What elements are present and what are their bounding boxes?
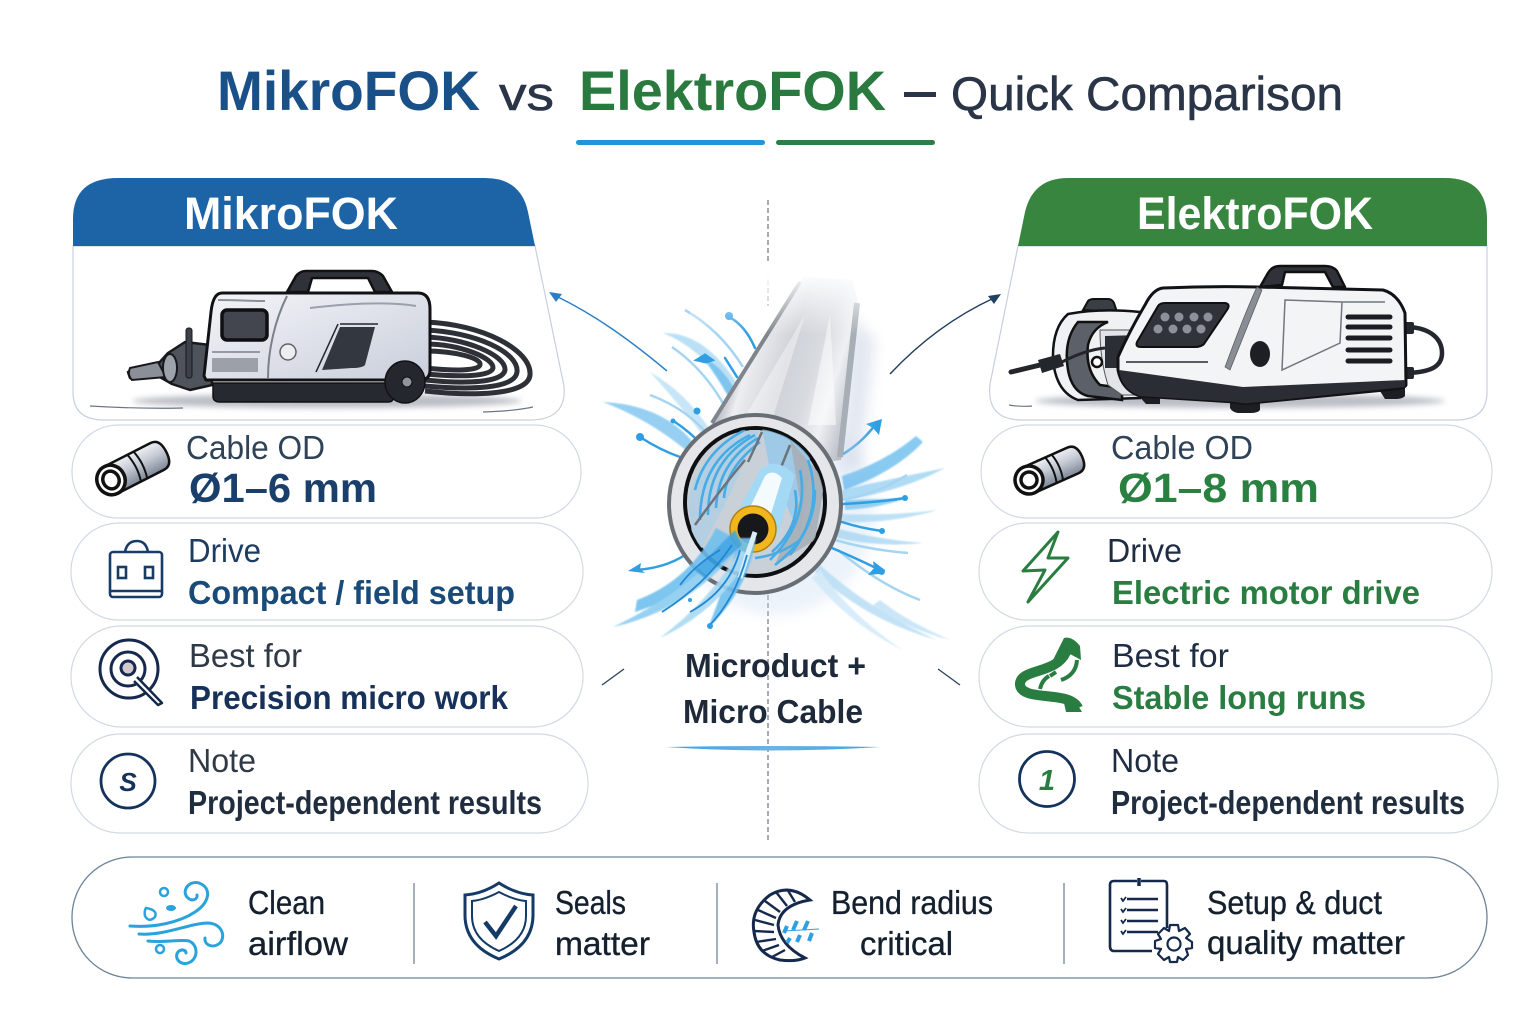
left row: Best for xyxy=(71,626,583,727)
left row: Best for: Best for xyxy=(189,637,302,674)
left row: Drive: Drive xyxy=(188,532,261,569)
title: MikroFOK xyxy=(217,59,480,122)
icon: clean airflow xyxy=(130,883,223,964)
bottom takeaways bar: Clean xyxy=(248,884,325,921)
micro cable with gold ferrule xyxy=(730,464,795,552)
right row: Cable OD: Cable OD xyxy=(1111,429,1253,466)
icon: S circle xyxy=(101,754,155,808)
connector tick left xyxy=(602,669,624,685)
central microduct illustration xyxy=(603,262,950,650)
title underline xyxy=(576,140,935,145)
icon: portable MikroFOK machine xyxy=(90,271,533,412)
right row: Best for: Stable long runs xyxy=(1112,679,1366,716)
ElektroFOK header xyxy=(1018,178,1487,246)
connector tick right xyxy=(938,669,960,685)
bottom takeaways bar: airflow xyxy=(248,925,348,962)
bottom takeaways bar: Setup & duct xyxy=(1207,884,1382,921)
title: ElektroFOK xyxy=(579,59,886,122)
center label: Microduct + xyxy=(685,647,866,684)
MikroFOK header xyxy=(73,178,535,246)
arrow: to MikroFOK xyxy=(549,292,667,371)
left row: Note: Note xyxy=(188,742,256,779)
left row: Drive: Compact / field setup xyxy=(188,574,515,611)
panel: MikroFOK machine card xyxy=(73,178,564,420)
title: vs xyxy=(499,67,554,120)
icon: number circle xyxy=(1020,752,1074,806)
ElektroFOK header: ElektroFOK xyxy=(1137,188,1373,239)
left row: Best for: Precision micro work xyxy=(190,679,509,716)
pipe body xyxy=(690,262,880,470)
right row: Drive: Electric motor drive xyxy=(1112,574,1420,611)
title xyxy=(217,59,1343,122)
right row: Best for: Best for xyxy=(1112,637,1229,674)
airflow rays front xyxy=(613,528,756,638)
left row: Note xyxy=(71,734,588,833)
title: Quick Comparison xyxy=(951,67,1343,120)
icon: number circle: 1 xyxy=(1039,765,1055,797)
right row: Note xyxy=(979,734,1498,833)
MikroFOK header: MikroFOK xyxy=(184,188,398,239)
bottom takeaways bar: Seals xyxy=(555,884,626,921)
right row: Note: Project-dependent results xyxy=(1111,784,1465,821)
left row: Drive xyxy=(71,523,583,620)
arrow: to ElektroFOK xyxy=(890,294,1001,374)
center label xyxy=(666,647,880,750)
center dashed divider xyxy=(767,200,769,842)
pipe opening ring xyxy=(669,415,841,593)
left row: Note: Project-dependent results xyxy=(188,784,542,821)
left row: Cable OD: Cable OD xyxy=(186,429,325,466)
bottom takeaways bar: Bend radius xyxy=(831,884,993,921)
icon: checklist and gear xyxy=(1110,878,1192,962)
icon: stable run arrow xyxy=(1020,638,1082,712)
icon: lightning bolt xyxy=(1023,532,1068,602)
icon: shield xyxy=(465,883,533,959)
icon: target xyxy=(100,640,162,705)
airflow rays behind pipe xyxy=(603,310,950,650)
icon: electric ElektroFOK machine xyxy=(1009,266,1445,413)
right row: Drive: Drive xyxy=(1107,532,1182,569)
icon: compact case xyxy=(110,541,162,597)
bottom takeaways bar: critical xyxy=(860,925,953,962)
right row: Cable OD: Ø1–8 mm xyxy=(1118,465,1319,511)
icon: S circle: S xyxy=(119,767,137,797)
icon: cable xyxy=(1011,444,1088,498)
center label: Micro Cable xyxy=(683,693,863,730)
left row: Cable OD xyxy=(72,425,581,518)
icon: bend radius xyxy=(753,889,819,961)
right row: Cable OD xyxy=(981,425,1492,518)
left row: Cable OD: Ø1–6 mm xyxy=(189,465,377,511)
bottom takeaways bar: matter xyxy=(555,925,650,962)
right row: Best for xyxy=(979,626,1492,727)
bottom takeaways bar: quality matter xyxy=(1207,924,1405,961)
bottom takeaways bar xyxy=(72,857,1487,978)
right row: Drive xyxy=(979,523,1492,620)
icon: cable xyxy=(92,438,173,500)
pipe bore with swirl xyxy=(688,428,825,565)
panel: ElektroFOK machine card xyxy=(990,178,1487,420)
right row: Note: Note xyxy=(1111,742,1179,779)
